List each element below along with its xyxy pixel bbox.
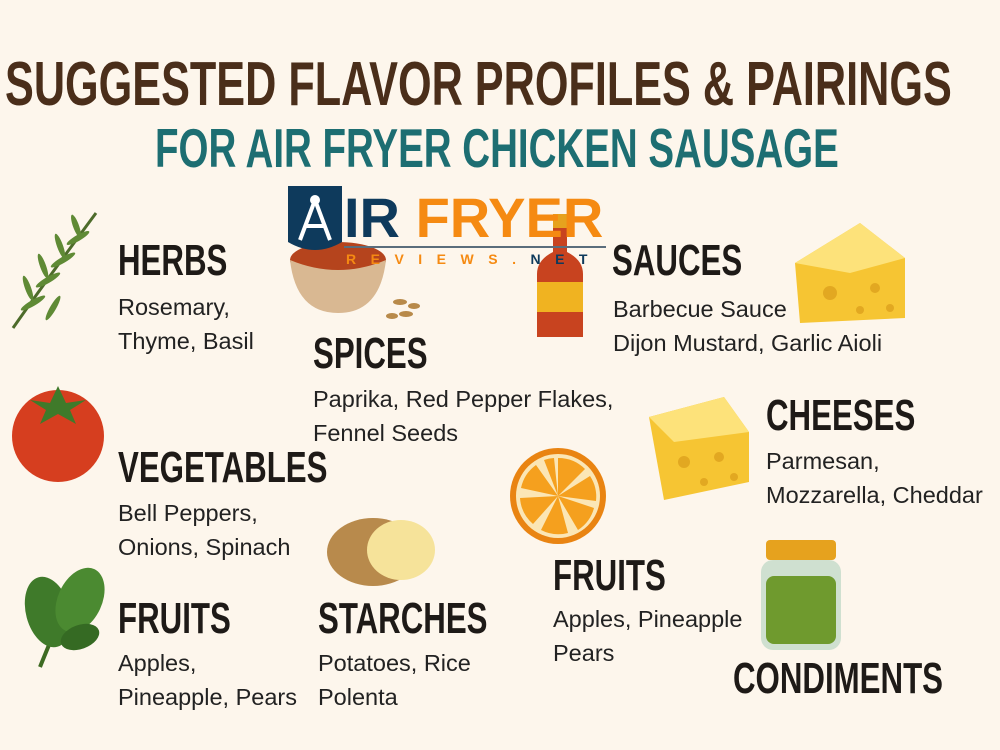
text: fruits left: Pineapple, Pears: [118, 684, 297, 710]
text: spices: Fennel Seeds: [313, 420, 458, 446]
text: starches: Polenta: [318, 684, 398, 710]
icon: orange slice: [510, 448, 606, 544]
text: cheeses: Parmesan,: [766, 448, 880, 474]
text: sauces: Dijon Mustard, Garlic Aioli: [613, 330, 882, 356]
text: fruits right: Pears: [553, 640, 614, 666]
icon: tomato: [12, 386, 104, 482]
icon: jar: [761, 540, 841, 650]
logo: IR FRYER: [344, 186, 603, 249]
icon: rosemary: [12, 212, 98, 329]
text: cheeses: [766, 448, 983, 508]
icon: cheese wedge: [795, 223, 905, 323]
text: vegetables: Onions, Spinach: [118, 534, 290, 560]
text: fruits left: [118, 650, 297, 710]
heading: condiments: CONDIMENTS: [733, 654, 943, 703]
text: fruits right: Apples, Pineapple: [553, 606, 742, 632]
text: vegetables: [118, 500, 290, 560]
heading: starches: STARCHES: [318, 594, 488, 643]
text: spices: [313, 386, 613, 446]
text: sauces: [613, 296, 882, 356]
icon: sauce bottle: [537, 214, 583, 337]
logo: [288, 186, 606, 267]
icon: spice bowl: [290, 242, 420, 319]
text: fruits left: Apples,: [118, 650, 196, 676]
text: starches: Potatoes, Rice: [318, 650, 471, 676]
heading: sauces: SAUCES: [612, 236, 742, 285]
text: sauces: Barbecue Sauce: [613, 296, 787, 322]
heading: fruits left: FRUITS: [118, 594, 231, 643]
text: herbs: Rosemary,: [118, 294, 230, 320]
heading: herbs: HERBS: [118, 236, 227, 285]
title line 1: SUGGESTED FLAVOR PROFILES & PAIRINGS: [5, 50, 952, 119]
text: starches: [318, 650, 471, 710]
icon: potato: [327, 518, 435, 586]
heading: cheeses: CHEESES: [766, 391, 915, 440]
icon: spinach: [24, 568, 105, 668]
text: herbs: [118, 294, 254, 354]
text: herbs: Thyme, Basil: [118, 328, 254, 354]
text: cheeses: Mozzarella, Cheddar: [766, 482, 983, 508]
heading: spices: SPICES: [313, 329, 428, 378]
heading: fruits right: FRUITS: [553, 551, 666, 600]
icon: cheese block: [649, 397, 749, 500]
title line 2: FOR AIR FRYER CHICKEN SAUSAGE: [155, 117, 839, 179]
text: vegetables: Bell Peppers,: [118, 500, 258, 526]
logo: REVIEWS.NET: [346, 251, 602, 267]
text: fruits right: [553, 606, 742, 666]
text: spices: Paprika, Red Pepper Flakes,: [313, 386, 613, 412]
heading: vegetables: VEGETABLES: [118, 443, 327, 492]
